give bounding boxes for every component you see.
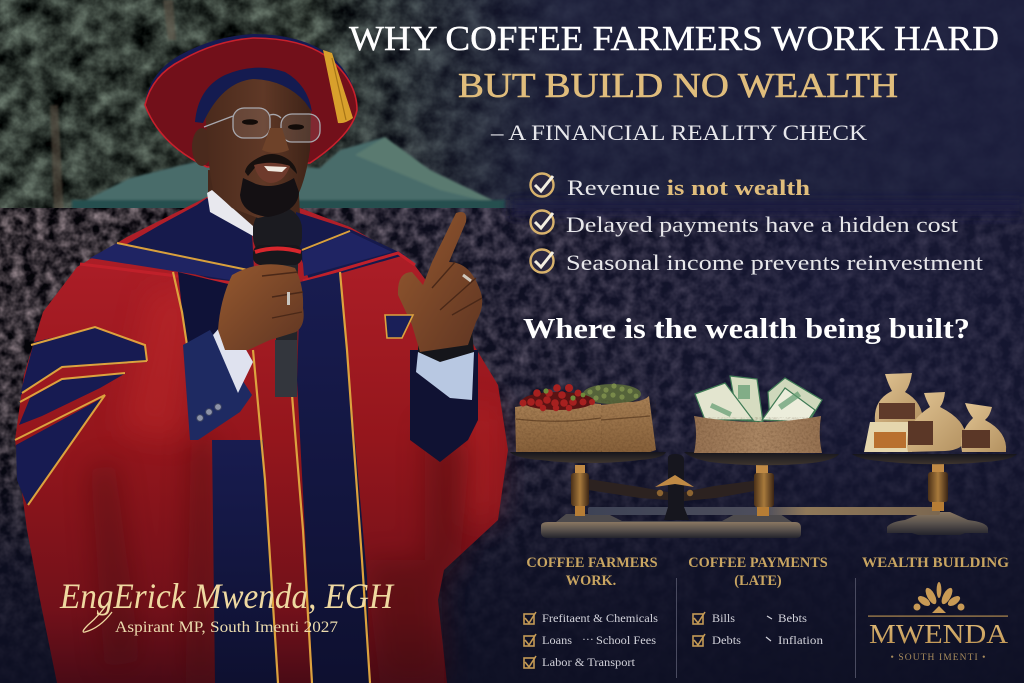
- hood gold and red trims: [80, 231, 415, 284]
- front navy panels: [178, 272, 250, 345]
- eyes: [242, 119, 304, 130]
- logo tagline: • SOUTH IMENTI •: [890, 653, 986, 663]
- scale rod: [588, 507, 940, 515]
- scale pillar right: [928, 464, 948, 511]
- script name: EngErick Mwenda, EGH: [59, 576, 395, 616]
- question heading: Where is the wealth being built?: [523, 314, 970, 345]
- sack: green coffee beans: [583, 383, 656, 452]
- background: tree trunks: [50, 0, 176, 215]
- item text: School Fees: [596, 633, 656, 647]
- navy yoke: [120, 198, 254, 290]
- white shirt cuff: [213, 318, 253, 393]
- academic cap brim: [145, 34, 357, 167]
- column divider: [855, 578, 856, 678]
- left arm navy sleeve: [183, 330, 252, 440]
- scale pillar middle: [754, 465, 774, 516]
- column heading: WEALTH BUILDING: [862, 555, 1009, 571]
- signature: [59, 576, 395, 636]
- scale beam: [588, 475, 760, 501]
- microphone: [253, 207, 302, 397]
- bottom column: wealth building: [862, 555, 1009, 663]
- item text: Debts: [712, 633, 741, 647]
- sleeve highlights: [120, 290, 495, 530]
- check item 2: Delayed payments have a hidden cost: [566, 212, 958, 237]
- gold trim lines: [173, 272, 370, 683]
- pan left: [510, 452, 666, 463]
- title line two: BUT BUILD NO WEALTH: [458, 66, 898, 105]
- checklist: [530, 174, 983, 275]
- money bags: [864, 373, 1006, 452]
- speaker figure: [15, 34, 508, 683]
- bag lower box: [864, 422, 912, 452]
- gown body: [15, 197, 508, 683]
- item text: Loans: [542, 633, 572, 647]
- pointing hand: [398, 212, 482, 352]
- left sleeve navy band: [15, 327, 147, 505]
- background: soft seam at crowd top right: [510, 200, 1024, 216]
- background: crowd: [0, 208, 1024, 683]
- check item 1: Revenue is not wealth: [567, 175, 810, 200]
- aspirant line: Aspirant MP, South Imenti 2027: [115, 619, 338, 636]
- tassel: [323, 50, 353, 123]
- column heading: COFFEE PAYMENTS: [688, 555, 828, 571]
- moustache and beard: [240, 154, 299, 217]
- neck: [208, 170, 300, 235]
- ear: [192, 128, 212, 166]
- checkbox icons: [524, 612, 536, 668]
- speaking hand: [218, 264, 304, 350]
- item text: ···: [582, 632, 594, 646]
- pan right: [852, 454, 1017, 464]
- check item 3: Seasonal income prevents reinvestment: [566, 250, 983, 275]
- burlap money sack: [694, 416, 822, 453]
- title line one: WHY COFFEE FARMERS WORK HARD: [349, 20, 999, 58]
- column heading: WORK.: [566, 573, 616, 589]
- bottom column: coffee farmers work: [524, 555, 658, 669]
- background: trees: [0, 0, 1024, 225]
- hood right band: [302, 232, 392, 276]
- item text: Bebts: [778, 611, 807, 625]
- scale base left: [541, 514, 801, 538]
- bill ink marks: [710, 385, 801, 417]
- bills: [695, 376, 822, 422]
- sleeve buttons: [197, 404, 221, 421]
- sack: red coffee cherries: [515, 384, 602, 452]
- scale centre post: [664, 454, 689, 520]
- cap band: [195, 68, 312, 123]
- checkbox icons: [693, 612, 705, 646]
- item text: Frefitaent & Chemicals: [542, 611, 658, 625]
- right lapel patch: [385, 315, 413, 338]
- background: navy horizontal wash: [0, 208, 1024, 683]
- background: tents: [72, 137, 505, 212]
- bag right: [961, 403, 1006, 452]
- item text: [712, 611, 823, 647]
- right dark inner sleeve: [410, 350, 478, 462]
- item text: Labor & Transport: [542, 655, 636, 669]
- scale base right: [887, 512, 988, 535]
- logo rule: [868, 616, 1008, 617]
- hood left band: [90, 243, 248, 282]
- subtitle: – A FINANCIAL REALITY CHECK: [490, 120, 868, 145]
- title block: [349, 20, 999, 145]
- scale pillar left: [571, 465, 589, 516]
- column divider: [676, 578, 677, 678]
- nose: [262, 128, 289, 153]
- bag middle: [907, 392, 966, 452]
- background: top right navy: [0, 0, 1024, 225]
- signature swash: [83, 600, 112, 632]
- pan middle: [684, 452, 839, 465]
- column heading: COFFEE FARMERS: [526, 555, 658, 571]
- dash marks: [766, 616, 772, 641]
- logo ornament: [914, 582, 964, 613]
- wrist watch band: [418, 330, 474, 362]
- item text: [542, 611, 658, 669]
- bag top: [875, 373, 923, 422]
- collar: [207, 190, 253, 236]
- sack: money: [694, 376, 822, 453]
- glasses: [204, 108, 320, 142]
- logo wordmark: MWENDA: [869, 619, 1009, 649]
- balance scale: [510, 452, 1017, 538]
- item text: Inflation: [778, 633, 823, 647]
- background: bottom fade: [0, 210, 1024, 683]
- column heading: (LATE): [734, 573, 782, 589]
- light blue cuff: [416, 352, 474, 400]
- bottom column: coffee payments late: [688, 555, 828, 647]
- head: [205, 75, 311, 218]
- item text: Bills: [712, 611, 735, 625]
- gown fold shading: [90, 420, 470, 683]
